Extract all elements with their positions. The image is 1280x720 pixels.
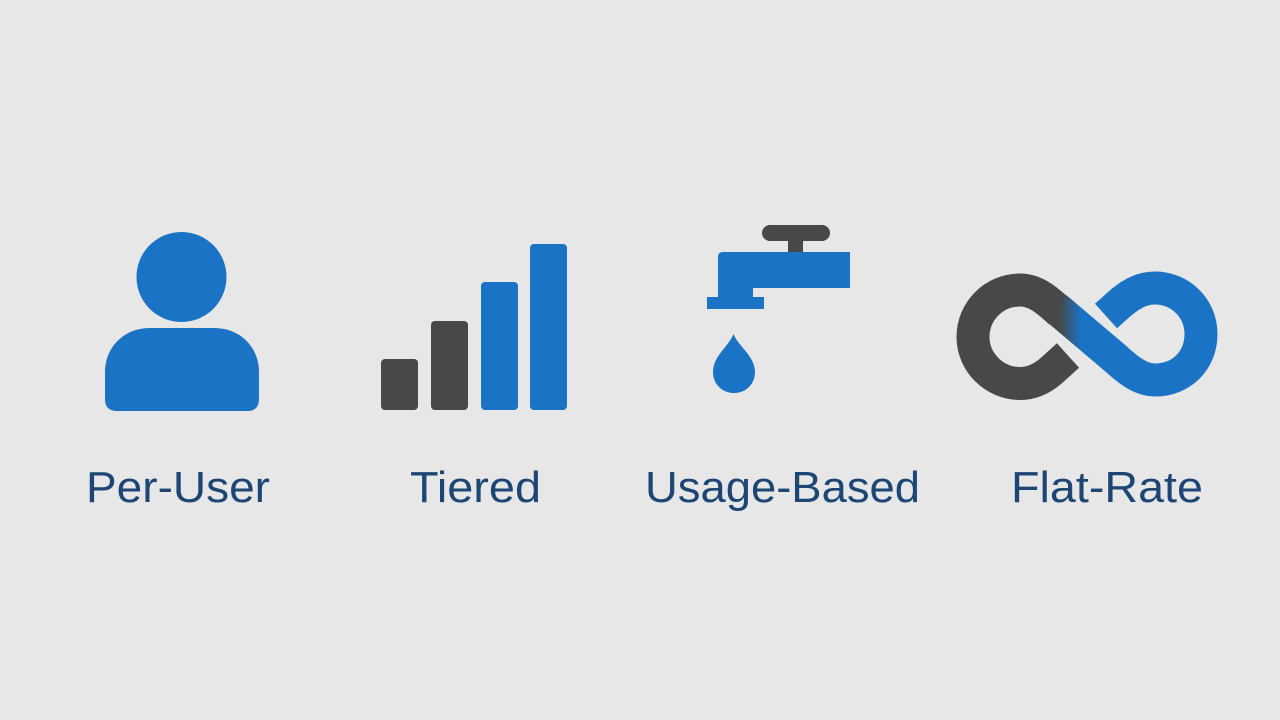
icon: infinity (Flat-Rate) xyxy=(973,288,1201,384)
icon: faucet and drop (Usage-Based) xyxy=(707,225,850,393)
label: Tiered: Tiered xyxy=(410,463,541,512)
label: Usage-Based: Usage-Based xyxy=(645,463,920,512)
icon: person (Per-User) xyxy=(105,232,259,411)
label: Per-User: Per-User xyxy=(86,463,270,512)
icon: tier bars (Tiered) xyxy=(381,244,567,410)
label: Flat-Rate: Flat-Rate xyxy=(1011,463,1203,512)
